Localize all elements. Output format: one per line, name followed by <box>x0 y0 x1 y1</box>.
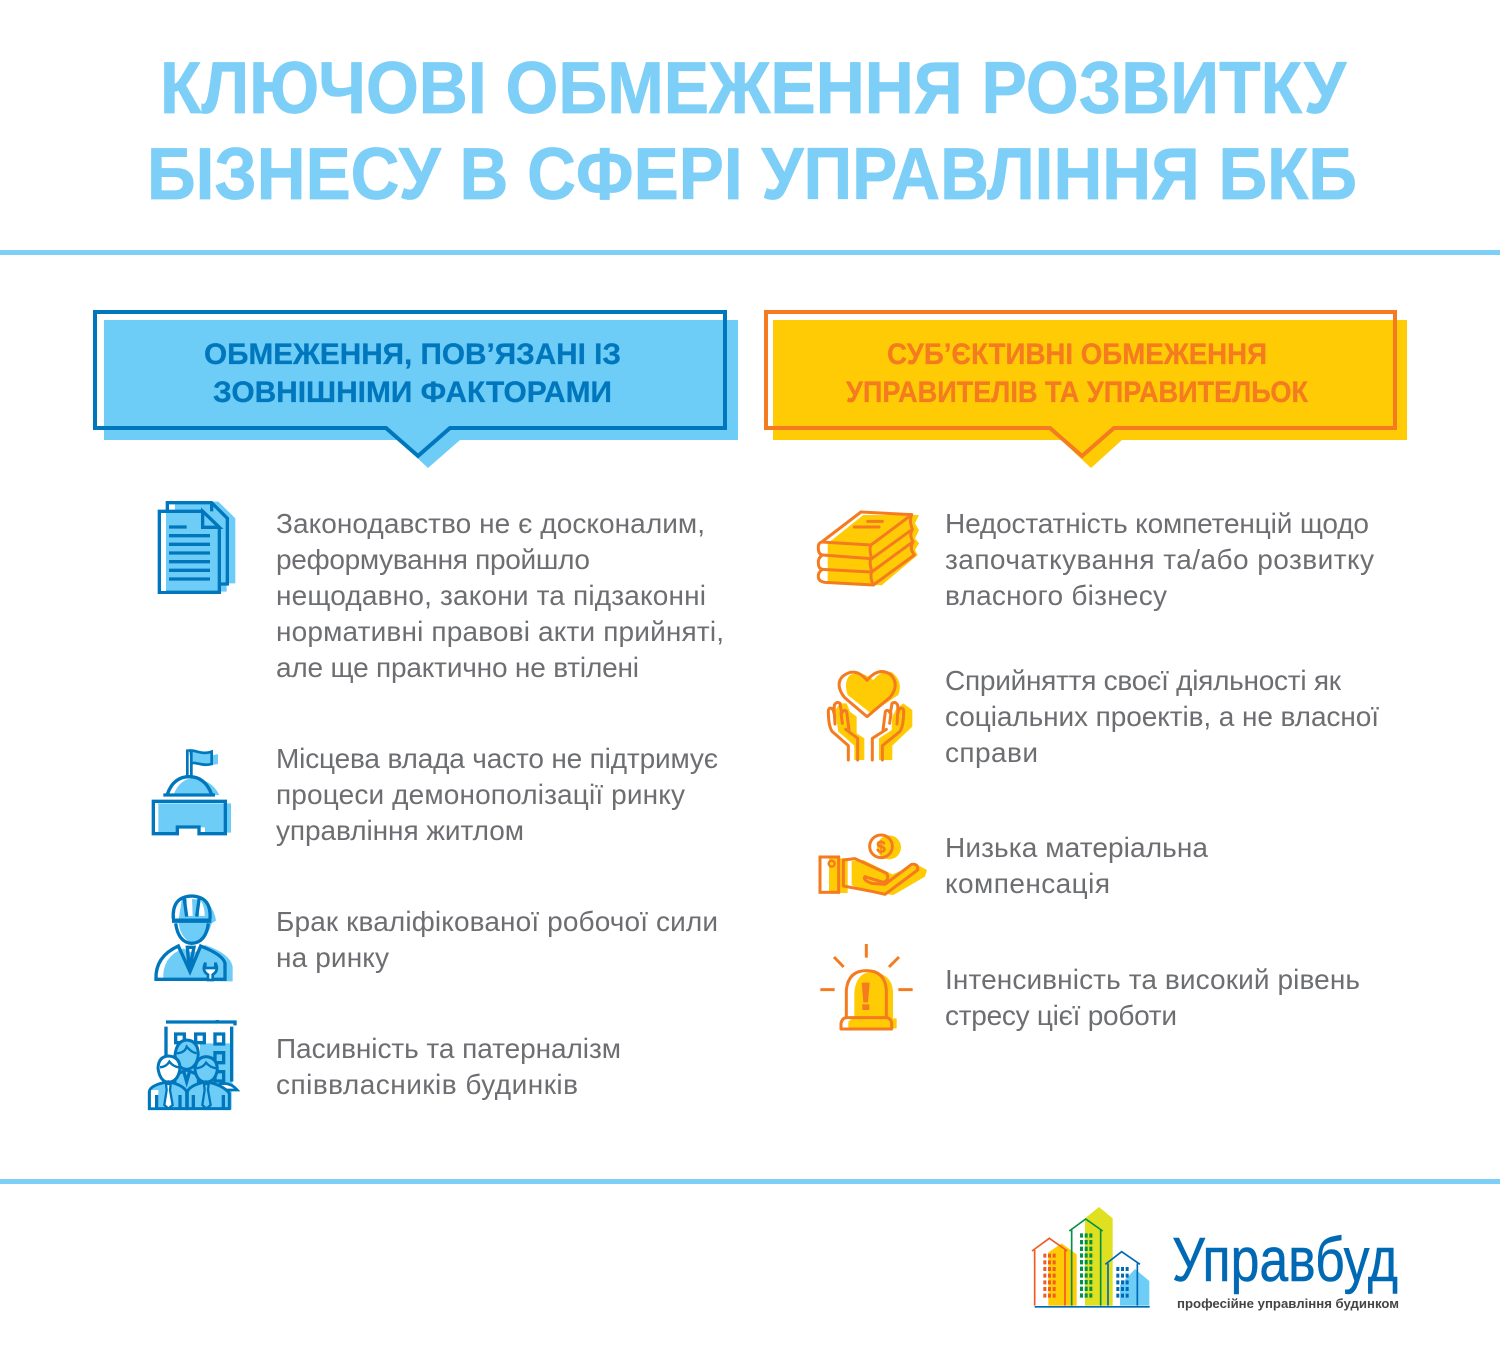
text: local authority: Місцева влада часто не підтримує <box>276 743 718 774</box>
icon: co-owners and building <box>149 1020 237 1109</box>
icon: documents <box>159 502 235 592</box>
logo wordmark: Управбуд <box>1172 1226 1398 1295</box>
text: legislation: реформування пройшло <box>276 544 590 575</box>
panel: subjective limits header <box>766 312 1407 468</box>
text: legislation <box>276 508 724 683</box>
text: passive co-owners: Пасивність та патерналізм <box>276 1033 621 1064</box>
icon: worker <box>156 896 233 981</box>
title: КЛЮЧОВІ ОБМЕЖЕННЯ РОЗВИТКУ <box>160 48 1347 129</box>
logo icon: houses <box>1032 1207 1150 1308</box>
panel: subjective limits header: СУБ’ЄКТИВНІ ОБМЕЖЕННЯ <box>887 338 1267 371</box>
icon: books <box>818 512 919 585</box>
title: БІЗНЕСУ В СФЕРІ УПРАВЛІННЯ БКБ <box>147 134 1357 215</box>
logo tagline: професійне управління будинком <box>1177 1296 1399 1311</box>
text: low pay: Низька матеріальна <box>945 832 1208 863</box>
text: low pay <box>945 832 1208 899</box>
text: local authority: управління житлом <box>276 815 524 846</box>
panel: external factors header: ЗОВНІШНІМИ ФАКТОРАМИ <box>213 376 612 409</box>
text: local authority <box>276 743 718 846</box>
icon: heart in hands <box>828 671 912 760</box>
panel: external factors header <box>95 312 738 468</box>
text: legislation: нормативні правові акти прийняті, <box>276 616 724 647</box>
text: lack of competencies: власного бізнесу <box>945 580 1167 611</box>
text: lack of competencies <box>945 508 1374 611</box>
icon: hand with coin: $ <box>876 837 886 856</box>
panel: subjective limits header: УПРАВИТЕЛІВ ТА УПРАВИТЕЛЬОК <box>846 376 1309 409</box>
panel: external factors header: ОБМЕЖЕННЯ, ПОВ’ЯЗАНІ ІЗ <box>204 338 621 371</box>
text: social projects <box>945 665 1379 768</box>
text: stress: Інтенсивність та високий рівень <box>945 964 1360 995</box>
text: lack of competencies: Недостатність компетенцій щодо <box>945 508 1369 539</box>
text: lack of competencies: започаткування та/або розвитку <box>945 544 1374 575</box>
logo: Upravbud <box>1032 1207 1399 1311</box>
text: social projects: Сприйняття своєї діяльності як <box>945 665 1342 696</box>
text: local authority: процеси демонополізації ринку <box>276 779 685 810</box>
icon: alarm light <box>820 944 913 1029</box>
text: legislation: Законодавство не є досконалим, <box>276 508 705 539</box>
text: legislation: нещодавно, закони та підзаконні <box>276 580 706 611</box>
text: legislation: але ще практично не втілені <box>276 652 639 683</box>
text: passive co-owners: співвласників будинків <box>276 1069 578 1100</box>
text: workforce: на ринку <box>276 942 389 973</box>
text: low pay: компенсація <box>945 868 1110 899</box>
text: social projects: справи <box>945 737 1038 768</box>
title <box>147 48 1357 215</box>
text: passive co-owners <box>276 1033 621 1100</box>
icon: local government <box>153 749 231 835</box>
text: workforce <box>276 906 718 973</box>
text: stress: стресу цієї роботи <box>945 1000 1177 1031</box>
text: social projects: соціальних проектів, а не власної <box>945 701 1379 732</box>
text: workforce: Брак кваліфікованої робочої сили <box>276 906 718 937</box>
icon: hand with coin <box>820 835 927 895</box>
text: stress <box>945 964 1360 1031</box>
